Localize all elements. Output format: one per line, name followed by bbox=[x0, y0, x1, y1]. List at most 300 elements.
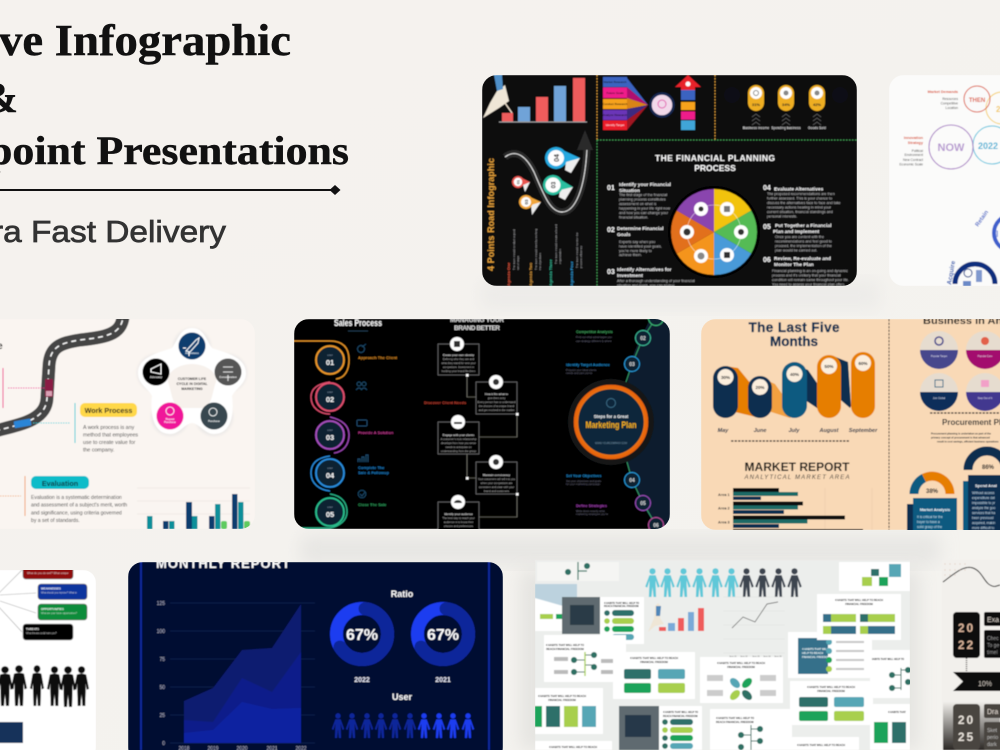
line chart: Item 01 bbox=[729, 655, 737, 658]
donut: 2022: 2022 bbox=[354, 677, 370, 684]
flow box text: building your brand fits them bbox=[442, 369, 476, 373]
marketing plan step labels: Write down exactly what bbox=[576, 509, 605, 513]
marketing plan badge: WWW.YOURCOMPANY.COM bbox=[595, 442, 627, 445]
right steps 04 to 06: recommendations and feel good to bbox=[775, 240, 832, 244]
slide: pill list: REACH FINANCIAL FREEDOM bbox=[604, 605, 639, 608]
heading: the financial planning process: PROCESS bbox=[694, 163, 736, 173]
pie badges: Step Out of It bbox=[978, 397, 993, 400]
step labels: Sale & Followup bbox=[358, 470, 389, 475]
funnel infographic: Analyze Research bbox=[603, 113, 627, 117]
area chart: 125 bbox=[157, 601, 165, 607]
line chart: Item 05 bbox=[774, 655, 782, 658]
market demands text: Competitive bbox=[941, 102, 958, 106]
slide: clover diagram: FINANCIAL FREEDOM bbox=[727, 665, 755, 669]
panel: market analysis: Market Analysis bbox=[920, 507, 951, 512]
slide: four labels lower: 4 HABITS THAT WILL HELP TO REACH bbox=[807, 685, 855, 689]
location pins: 04 bbox=[554, 154, 561, 162]
slide: four icon tiles: 4 HABITS THAT WILL HELP TO REACH bbox=[835, 598, 883, 602]
flow box icons bbox=[450, 337, 518, 509]
heading: sales process: Sales Process bbox=[334, 318, 382, 329]
agenda columns: the objectives bbox=[538, 252, 542, 270]
right steps 04 to 06: necessary actions bearing in mind your bbox=[767, 206, 832, 210]
right steps 04 to 06: plan would be carried out. bbox=[775, 248, 817, 252]
pie badges: Popular Core bbox=[978, 355, 993, 358]
gauge: 86 percent bbox=[968, 451, 1000, 471]
circle: then bbox=[964, 86, 1000, 124]
pill: threats: THREATS bbox=[26, 627, 39, 631]
dashed dividers bbox=[731, 319, 1000, 530]
left steps 01 to 03: assessment on what is bbox=[619, 202, 656, 206]
heading: managing your brand better bbox=[449, 319, 505, 331]
left steps 01 to 03: situation and goals, you can review bbox=[617, 284, 675, 288]
agenda columns: Agenda Four bbox=[569, 261, 574, 286]
flow box text: develops from how you serve bbox=[441, 441, 476, 445]
callout: work process: method that employees bbox=[83, 432, 138, 438]
area chart bbox=[157, 601, 315, 750]
panel: then and now slide bbox=[889, 75, 1000, 286]
panel: last five months and market report slide bbox=[701, 316, 1000, 534]
agenda columns: organization bbox=[558, 248, 562, 264]
slide: clover diagram: 4 HABITS THAT WILL HELP TO REACH bbox=[717, 661, 765, 665]
step icons bbox=[356, 344, 368, 498]
capsule chart bbox=[713, 352, 878, 434]
funnel infographic: Conduct Research bbox=[603, 102, 628, 106]
step circles: STEP bbox=[327, 468, 333, 470]
slide: pill list bbox=[600, 597, 644, 644]
heading: managing your brand better: MANAGING YOUR bbox=[450, 317, 504, 324]
line chart bbox=[723, 597, 785, 658]
step labels: Provide A Solution bbox=[358, 430, 394, 435]
bar chart bbox=[146, 493, 250, 529]
timeline block 2022: Chec bbox=[987, 636, 999, 642]
slide: teal panel list: 4 HABITS THAT WILL bbox=[802, 647, 829, 651]
step circles: 03 bbox=[326, 433, 334, 442]
heading: the last five months bbox=[748, 320, 840, 349]
left steps 01 to 03: Investment bbox=[617, 273, 643, 279]
flow box text: give them a try bbox=[488, 396, 506, 400]
step labels: Complete The bbox=[358, 465, 385, 470]
location pins bbox=[512, 147, 580, 215]
panel: market analysis bbox=[907, 498, 957, 534]
donut: 2021: 67% bbox=[427, 627, 459, 644]
gauge: 38 percent: 38% bbox=[926, 489, 939, 495]
numbered timeline nodes: 05 bbox=[640, 501, 646, 507]
icon: stacked arrow bbox=[675, 75, 701, 130]
flow box text: Create your own identity bbox=[443, 353, 475, 357]
left steps 01 to 03: Experts say when you bbox=[619, 240, 655, 244]
percent pills: 31% bbox=[752, 102, 760, 107]
panel: market analysis: solid grasp of the bbox=[917, 525, 942, 529]
panel: spend analysis: Without access bbox=[972, 491, 995, 495]
heading: sales process bbox=[334, 318, 382, 331]
heading: monthly report: MONTHLY REPORT bbox=[156, 556, 290, 571]
right navy background shape bbox=[628, 322, 670, 526]
left steps 01 to 03: 03 bbox=[607, 269, 615, 276]
slide: bottom strip left bbox=[535, 741, 612, 750]
heading: the last five months: Months bbox=[770, 334, 818, 349]
slide: teal panel list: HELP TO REACH bbox=[802, 651, 823, 655]
left steps 01 to 03: planning process constitutes bbox=[619, 198, 666, 202]
callout: work process: Work Process bbox=[85, 406, 132, 415]
right steps 04 to 06: Evaluate Alternatives bbox=[774, 186, 824, 192]
flow box text: choices and preferences bbox=[444, 524, 474, 528]
step circles: STEP bbox=[327, 430, 333, 432]
line chart: Item 02 bbox=[740, 655, 748, 658]
flow box text: brand and customers bbox=[484, 489, 510, 493]
heading: procurement planning bbox=[931, 418, 1000, 444]
capsule chart: September bbox=[849, 428, 878, 434]
percent pills: Goods Sold bbox=[808, 126, 826, 130]
marketing plan step labels: needs and pain points bbox=[566, 371, 593, 375]
side accent lines bbox=[141, 562, 489, 750]
location pins: 03 bbox=[524, 199, 529, 205]
pill: weaknesses bbox=[38, 584, 87, 600]
road curve with arrow bbox=[505, 130, 593, 212]
step labels: Close The Sale bbox=[358, 502, 387, 507]
marketing plan badge: Marketing Plan bbox=[586, 420, 637, 431]
retain ring bbox=[975, 209, 1000, 251]
callout: evaluation: by a set of standards. bbox=[31, 518, 80, 524]
flow box text: and get involved in the market bbox=[479, 408, 515, 412]
flow box text bbox=[441, 353, 516, 528]
percent pills bbox=[724, 85, 848, 130]
label: discover client needs: Discover Client Needs bbox=[424, 400, 467, 405]
banner arrow 10 percent: 10% bbox=[978, 681, 992, 688]
callout: work process: use to create value for bbox=[83, 440, 136, 446]
slide: four labels lower bbox=[790, 681, 873, 725]
right steps 04 to 06: Financial planning is an on-going and dynamic bbox=[772, 269, 848, 273]
slide: photo with pill list: REACH FINANCIAL FREEDOM bbox=[663, 715, 698, 718]
horizontal bar chart: Area 3 bbox=[718, 520, 730, 524]
circle: now and 2022: 2022 bbox=[978, 141, 998, 151]
gauge: 86 percent: 86% bbox=[982, 465, 995, 471]
heading: ratio: Ratio bbox=[391, 589, 414, 599]
right steps 04 to 06: personal interests. bbox=[767, 214, 797, 218]
right steps 04 to 06: The proposed recommendations are then bbox=[767, 192, 835, 196]
right steps 04 to 06: Put Together a Financial bbox=[775, 223, 832, 229]
agenda columns: process efficiency bbox=[579, 245, 583, 268]
pie badges: Join Global bbox=[933, 397, 946, 400]
bar chart with woman bbox=[483, 75, 587, 122]
marketing plan step labels: for your marketing campaign bbox=[566, 482, 601, 486]
step circles: STEP bbox=[327, 507, 333, 509]
timeline block 2022: To ge bbox=[987, 643, 999, 649]
timeline block 2022: timel bbox=[987, 650, 998, 656]
slide: tree diagram: REACH FINANCIAL FREEDOM bbox=[546, 647, 584, 651]
heading: the financial planning process: THE FINANCIAL PLANNING bbox=[655, 153, 775, 163]
right steps 04 to 06: 06 bbox=[763, 257, 771, 264]
flow box text: A customer's trust relationship bbox=[441, 437, 477, 441]
marketing plan step labels: Competitor Analysis bbox=[576, 330, 613, 334]
numbered timeline nodes: 02 bbox=[640, 336, 646, 342]
timeline block 2022: 20 bbox=[958, 621, 975, 635]
panel: spend analysis: analyze the goo bbox=[972, 506, 995, 510]
left steps 01 to 03: Goals bbox=[617, 232, 631, 238]
innovation strategy text bbox=[899, 136, 924, 166]
marketing plan badge: Steps for a Great bbox=[594, 414, 629, 419]
marketing plan step labels: Set Your Objectives bbox=[566, 474, 602, 478]
numbered timeline nodes bbox=[624, 310, 664, 532]
left steps 01 to 03: The first stage of the financial bbox=[619, 193, 667, 197]
flow box text: competitors. Investment in bbox=[443, 365, 475, 369]
timeline block 2022 bbox=[953, 612, 1000, 658]
pie badges bbox=[920, 331, 1000, 411]
panel: spend analysis: expenditure dat bbox=[972, 496, 995, 500]
slide: bottom strip center: 4 HABITS THAT WILL HELP TO REACH bbox=[797, 743, 845, 747]
banner arrow 10 percent bbox=[953, 672, 1000, 691]
dotted panel dividers bbox=[597, 75, 857, 286]
funnel infographic: Identify Target bbox=[606, 123, 625, 127]
slide: four labels lower: FINANCIAL FREEDOM bbox=[817, 689, 845, 693]
step circles bbox=[294, 341, 349, 528]
donut: 2021: 2021 bbox=[435, 677, 451, 684]
area chart: 25 bbox=[159, 713, 165, 719]
right steps 04 to 06: proceed, the implementation of the bbox=[775, 244, 832, 248]
customer life cycle diagram: CUSTOMER LIFE bbox=[178, 377, 207, 381]
horizontal bar chart: Area 1 bbox=[718, 493, 730, 497]
slide: pill list: 4 HABITS THAT WILL HELP TO bbox=[604, 602, 639, 605]
right steps 04 to 06: Review, Re-evaluate and bbox=[774, 256, 831, 262]
percent pills: 34% bbox=[782, 102, 790, 107]
step circles: 02 bbox=[326, 395, 334, 404]
innovation strategy text: Economic Scale bbox=[899, 162, 923, 166]
timeline block 2025: perio bbox=[987, 735, 998, 741]
capsule chart: May bbox=[718, 428, 729, 434]
gauge: 38 percent bbox=[914, 476, 950, 495]
agenda columns: The team should monitor the bbox=[575, 232, 579, 268]
connector lines bbox=[0, 570, 36, 632]
left steps 01 to 03: Determine Financial bbox=[617, 226, 664, 232]
slide: four icon tiles bbox=[817, 594, 901, 640]
left steps 01 to 03: Situation bbox=[619, 188, 640, 194]
panel: financial planning dark slide bbox=[482, 75, 857, 288]
pill: weaknesses: WEAKNESSES bbox=[41, 586, 61, 590]
timeline block 2022: Exa bbox=[987, 617, 999, 624]
panel: monthly report slide bbox=[128, 556, 503, 750]
customer life cycle diagram: Repeat bbox=[166, 417, 174, 421]
left steps 01 to 03: After a thorough understanding of your financial bbox=[617, 279, 695, 283]
capsule chart: June bbox=[754, 428, 766, 434]
right steps 04 to 06: process and it's unlikely that your financial bbox=[772, 274, 841, 278]
flow box text: the choices of a unique brand bbox=[479, 404, 515, 408]
flow box text: The best way to reach your bbox=[442, 516, 475, 520]
slide: four cards: FINANCIAL FREEDOM bbox=[548, 698, 576, 702]
slide: right edge cards bbox=[870, 704, 910, 750]
agenda columns: Agenda One bbox=[506, 262, 511, 286]
marketing plan step labels bbox=[566, 330, 613, 516]
marketing plan step labels: marketing strategies you're bbox=[576, 512, 609, 516]
truck: maroon bbox=[45, 379, 53, 397]
agenda columns: The team should conduct a good bbox=[512, 229, 516, 270]
right steps 04 to 06: condition will remain same throughout your life. bbox=[772, 278, 849, 282]
pill: strengths: What do you do well? What unique bbox=[27, 571, 69, 575]
area chart: 50 bbox=[159, 685, 165, 691]
location pins: 01 bbox=[516, 179, 520, 184]
step labels bbox=[358, 355, 398, 507]
agenda columns: set of steps bbox=[516, 255, 520, 270]
agenda columns bbox=[506, 224, 583, 286]
callout: evaluation: Evaluation is a systematic determination bbox=[31, 495, 122, 501]
donut: 2022: 67% bbox=[346, 627, 378, 644]
right steps 04 to 06 bbox=[763, 185, 849, 286]
slide: tree diagram: 4 HABITS THAT WILL HELP TO bbox=[546, 643, 584, 647]
numbered timeline nodes: 03 bbox=[629, 362, 635, 368]
step circles: STEP bbox=[327, 392, 333, 394]
customer life cycle diagram: Purchase bbox=[208, 419, 220, 423]
right steps 04 to 06: further assessed. This is your chance to bbox=[767, 196, 832, 200]
percent pills: Spending business bbox=[771, 126, 801, 130]
step circles: 04 bbox=[326, 471, 335, 480]
heading: procurement planning: Procurement planning is undertaken as part of the bbox=[931, 432, 991, 436]
dotted connector bbox=[966, 658, 968, 672]
donut: 2021 bbox=[418, 608, 468, 684]
slide: four labels bbox=[613, 652, 695, 699]
callout: evaluation bbox=[0, 476, 127, 524]
funnel infographic: Future Goals bbox=[606, 91, 624, 95]
marketing plan step labels: Set your objectives and goals bbox=[566, 479, 602, 483]
area chart: 100 bbox=[157, 629, 165, 635]
circle: then: THEN bbox=[969, 98, 985, 104]
innovation strategy text: New Contract bbox=[903, 158, 923, 162]
flow box text: needs to anticipate on bbox=[445, 445, 472, 449]
area chart: 75 bbox=[159, 657, 165, 663]
customer life cycle diagram: CYCLE IN DIGITAL bbox=[176, 382, 208, 386]
photo: laptop bbox=[562, 597, 600, 634]
title bbox=[0, 16, 349, 173]
heading: market report: MARKET REPORT bbox=[744, 460, 850, 474]
step circles: STEP bbox=[327, 355, 333, 357]
callout: evaluation: and significance, using criteria governed bbox=[31, 510, 122, 516]
left steps 01 to 03: 01 bbox=[607, 185, 615, 192]
customer life cycle diagram: Purchase bbox=[164, 420, 176, 424]
horizontal bar chart bbox=[718, 488, 872, 531]
flow box text: Maintain consistency bbox=[483, 473, 511, 477]
timeline block 2025: dark bbox=[987, 742, 997, 748]
flow boxes bbox=[438, 344, 517, 534]
slide: top left thumbnail bbox=[537, 562, 619, 581]
pie chart with icons bbox=[668, 186, 760, 278]
callout: evaluation: Evaluation bbox=[42, 479, 78, 488]
slide: four cards: 4 HABITS THAT WILL HELP TO REACH bbox=[538, 694, 586, 698]
decorative wave bbox=[943, 563, 1000, 586]
right steps 04 to 06: You need to assess your financial plan often. bbox=[772, 282, 845, 286]
slide: blue cover bbox=[535, 584, 577, 631]
slide: four labels: 4 HABITS THAT WILL HELP TO REACH bbox=[630, 656, 678, 660]
slide: right edge cards: 4 HABITS THAT bbox=[888, 711, 906, 714]
numbered timeline nodes: 04 bbox=[629, 478, 635, 484]
line chart: Item 04 bbox=[763, 655, 771, 658]
panel: sales process and marketing plan slide bbox=[294, 310, 670, 534]
slide: four labels: FINANCIAL FREEDOM bbox=[640, 660, 668, 664]
timeline block 2025: Dra bbox=[987, 709, 998, 716]
funnel infographic: Market Research bbox=[604, 80, 627, 84]
panel: spend analysis: services that ha bbox=[972, 511, 995, 515]
panel: spend analysis: acquired, makin bbox=[972, 521, 995, 525]
line chart: Item 03 bbox=[752, 655, 760, 658]
right steps 04 to 06: Plan and Implement bbox=[773, 229, 820, 235]
flow box text: Defining who they are and bbox=[443, 357, 475, 361]
marketing plan step labels: Pinpoint your ideal clients bbox=[566, 368, 597, 372]
vertical road title: 4 Points Road Infographic bbox=[486, 158, 496, 271]
timeline block 2025 bbox=[953, 704, 1000, 750]
capsule chart: 50% bbox=[824, 364, 834, 369]
marketing plan step labels: Define Strategies bbox=[576, 504, 607, 508]
pill: weaknesses: What should you improve? What to bbox=[41, 592, 77, 594]
slide: bottom strip left: 4 HABITS THAT WILL HELP TO REACH bbox=[549, 745, 597, 749]
left steps 01 to 03: have identified your goals, bbox=[619, 244, 662, 248]
callout: evaluation: and assessment of a subject's merit, worth bbox=[31, 502, 127, 508]
flow box text: what they stand for sets your bbox=[441, 361, 476, 365]
right steps 04 to 06: discuss the alternatives face to face and take bbox=[767, 201, 841, 205]
flow box text: consistent and clear with your bbox=[479, 485, 514, 489]
panel: slide collage bbox=[535, 560, 911, 750]
numbered timeline nodes: 06 bbox=[653, 523, 659, 529]
innovation strategy text: Political bbox=[912, 149, 923, 153]
marketing plan badge bbox=[568, 379, 654, 465]
panel: market analysis: It is critical for the bbox=[917, 515, 943, 519]
panel: timeline slide bbox=[942, 560, 1000, 750]
acquire ring bbox=[946, 260, 995, 286]
people pictogram bbox=[645, 568, 802, 597]
team silhouettes bbox=[0, 665, 89, 707]
donut: 2022 bbox=[336, 608, 388, 684]
capsule chart: 40% bbox=[790, 372, 799, 377]
horizontal bar chart: Area 2 bbox=[718, 506, 730, 510]
slide: teal panel list: FINANCIAL FREEDOM bbox=[802, 655, 830, 659]
panel: spend analysis: been previousl bbox=[972, 516, 994, 520]
panel: swot team slide bbox=[0, 565, 96, 750]
percent pills: 42% bbox=[813, 102, 821, 107]
right steps 04 to 06: 05 bbox=[763, 224, 771, 231]
left steps 01 to 03: and how you can change your bbox=[619, 211, 669, 215]
panel: road and customer life cycle slide bbox=[0, 317, 255, 529]
left steps 01 to 03 bbox=[607, 182, 695, 288]
agenda columns: Agenda Three bbox=[548, 259, 553, 286]
pill: threats: What threats could harm you? bbox=[26, 632, 57, 635]
flow box text: understanding from the group bbox=[441, 449, 477, 453]
location pins: 03 bbox=[552, 181, 558, 188]
market demands text bbox=[928, 90, 958, 110]
agenda columns: Agenda Two bbox=[528, 262, 533, 286]
left steps 01 to 03: happening in your life right now bbox=[619, 206, 670, 210]
panel: spend analysis: impossible to pr bbox=[972, 501, 996, 505]
market demands text: Location bbox=[946, 106, 958, 110]
pill: opportunities bbox=[38, 604, 87, 620]
funnel infographic bbox=[603, 77, 674, 130]
slide: right edge tree: HABITS THAT WILL HELP TO bbox=[871, 658, 904, 661]
callout: work process: A work process is any bbox=[83, 425, 135, 431]
timeline block 2025: 20 bbox=[958, 713, 975, 727]
acquire ring: Acquire bbox=[946, 260, 957, 285]
slide: teal panel list bbox=[788, 632, 872, 678]
customer life cycle diagram: Advocacy bbox=[150, 375, 163, 379]
step circles: 05 bbox=[326, 510, 334, 519]
right steps 04 to 06: Monitor The Plan bbox=[774, 262, 814, 268]
panel: spend analysis: Spend Anal bbox=[975, 483, 997, 488]
heading: business in and: Business in And bbox=[923, 316, 1000, 327]
slide: four cards bbox=[535, 688, 603, 734]
user pictogram bbox=[332, 713, 474, 738]
small navy slide thumbnail bbox=[0, 722, 23, 743]
heading: market report: ANALYTICAL MARKET AREA bbox=[744, 475, 850, 481]
heading: the last five months: The Last Five bbox=[748, 320, 840, 335]
market demands text: Resources bbox=[942, 97, 958, 101]
flow box text: How it fits what to bbox=[485, 392, 508, 396]
capsule chart: 60% bbox=[858, 361, 868, 366]
pill: opportunities: OPPORTUNITIES bbox=[41, 607, 64, 611]
pie badges: Popular Target bbox=[931, 355, 947, 358]
timeline block 2025: 25 bbox=[958, 730, 975, 744]
